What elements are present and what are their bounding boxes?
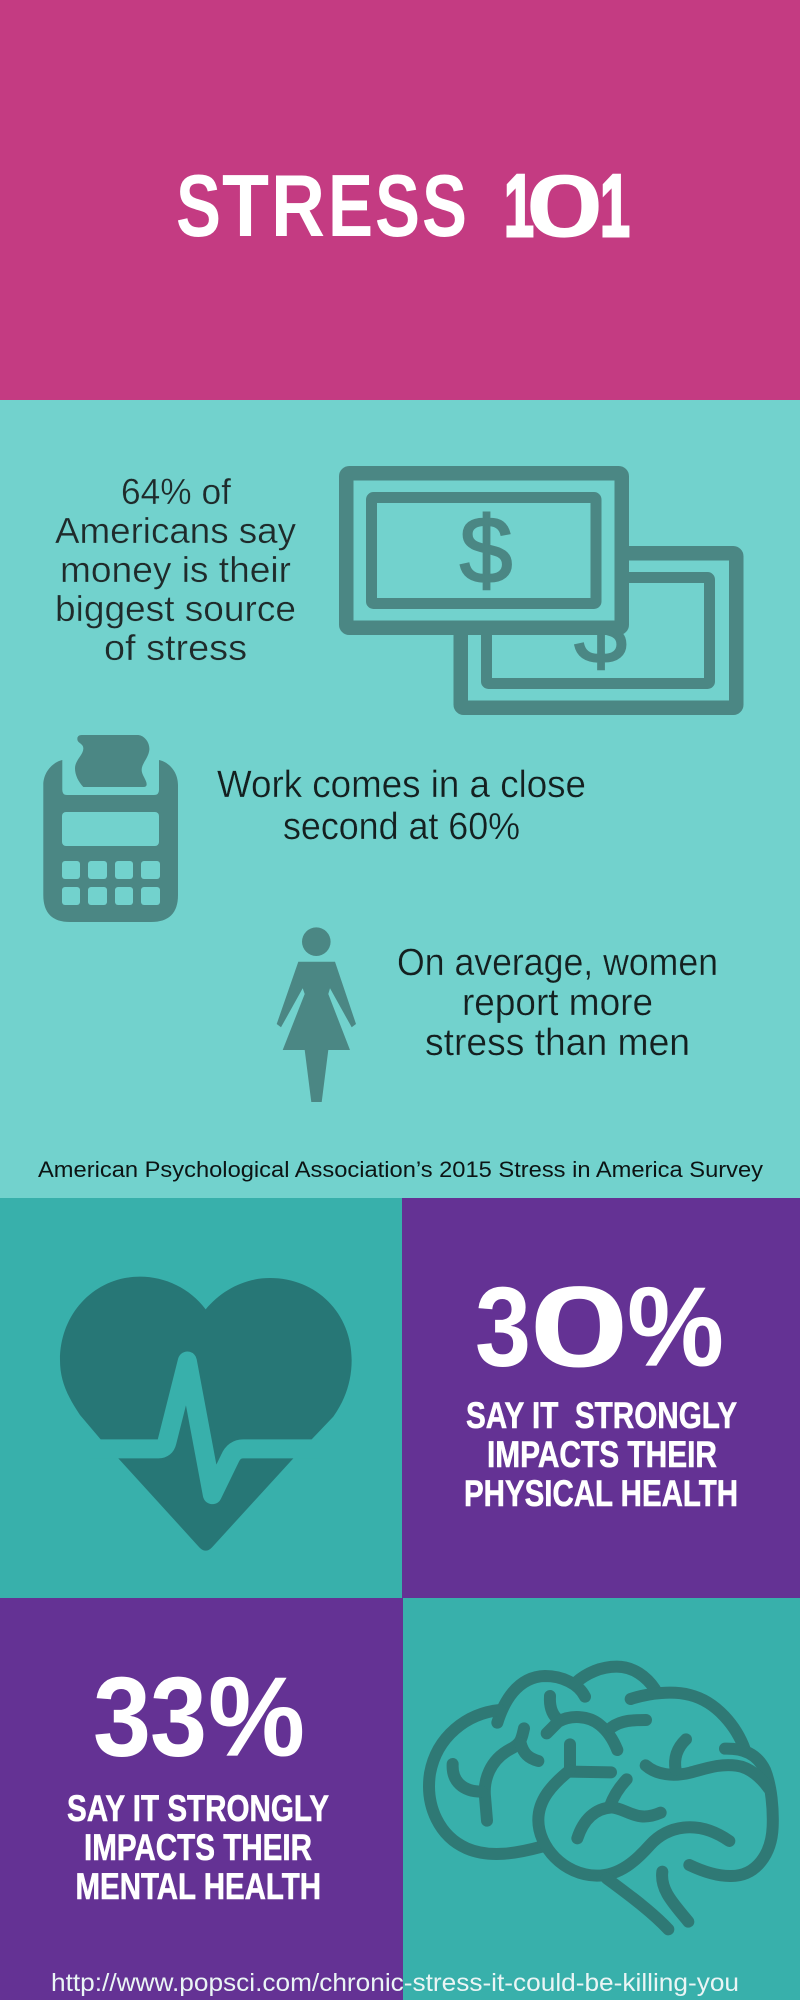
number: 30%: 3 bbox=[475, 1264, 531, 1390]
panel: mental health stat bbox=[0, 1598, 403, 2000]
text: money stat: 64% of bbox=[121, 471, 232, 512]
text: mental health: SAY IT STRONGLY bbox=[67, 1788, 329, 1829]
text: source URL: http://www.popsci.com/chronic-stress-it-could-be-killing-you bbox=[51, 1969, 739, 1997]
text: physical health: PHYSICAL HEALTH bbox=[464, 1473, 738, 1514]
text: women stat bbox=[397, 942, 718, 1064]
text: money stat: money is their bbox=[60, 549, 291, 590]
title: 1 bbox=[504, 156, 534, 255]
title: 0 bbox=[528, 159, 601, 253]
text: mental health: IMPACTS THEIR bbox=[84, 1827, 312, 1868]
icon: brain bbox=[429, 1667, 773, 1929]
number: 33%: % bbox=[208, 1654, 305, 1780]
number: 33%: 3 bbox=[150, 1654, 207, 1780]
text: women stat: On average, women bbox=[397, 942, 718, 984]
number: 30%: % bbox=[627, 1264, 724, 1390]
text: mental health: MENTAL HEALTH bbox=[76, 1866, 321, 1907]
title: R bbox=[271, 156, 325, 255]
number: 33%: 3 bbox=[93, 1654, 151, 1780]
text: women stat: report more bbox=[462, 982, 653, 1024]
text: physical health bbox=[464, 1395, 738, 1514]
text: money stat: of stress bbox=[104, 627, 247, 668]
panel: survey findings bbox=[0, 400, 800, 1198]
title: 1 bbox=[600, 156, 630, 255]
text: physical health: SAY IT STRONGLY bbox=[466, 1395, 737, 1436]
text: money stat: Americans say bbox=[55, 510, 296, 551]
number: 30%: 0 bbox=[533, 1266, 625, 1387]
text: work stat: second at 60% bbox=[283, 806, 520, 848]
title: E bbox=[328, 156, 373, 255]
icon: money bills: $ bbox=[460, 498, 512, 604]
text: money stat bbox=[55, 471, 296, 668]
panel: header bbox=[0, 0, 800, 400]
icon: woman bbox=[277, 927, 356, 1102]
text: mental health bbox=[67, 1788, 329, 1907]
panel: physical health stat bbox=[402, 1198, 800, 1598]
text: women stat: stress than men bbox=[425, 1022, 690, 1064]
title: T bbox=[222, 156, 269, 255]
icon: money bills bbox=[346, 473, 736, 708]
text: survey source: American Psychological Association’s 2015 Stress in America Survey bbox=[38, 1157, 763, 1182]
panel: brain bbox=[403, 1598, 800, 2000]
text: work stat bbox=[217, 764, 586, 848]
title: S bbox=[422, 156, 467, 255]
title: S bbox=[375, 156, 420, 255]
panel: heart bbox=[0, 1198, 402, 1598]
text: work stat: Work comes in a close bbox=[217, 764, 586, 806]
text: physical health: IMPACTS THEIR bbox=[487, 1434, 717, 1475]
icon: calculator bbox=[43, 735, 178, 922]
title: S bbox=[176, 156, 221, 255]
text: money stat: biggest source bbox=[55, 588, 296, 629]
icon: heart with pulse bbox=[60, 1277, 352, 1551]
icon: money bills: $ bbox=[574, 578, 627, 684]
